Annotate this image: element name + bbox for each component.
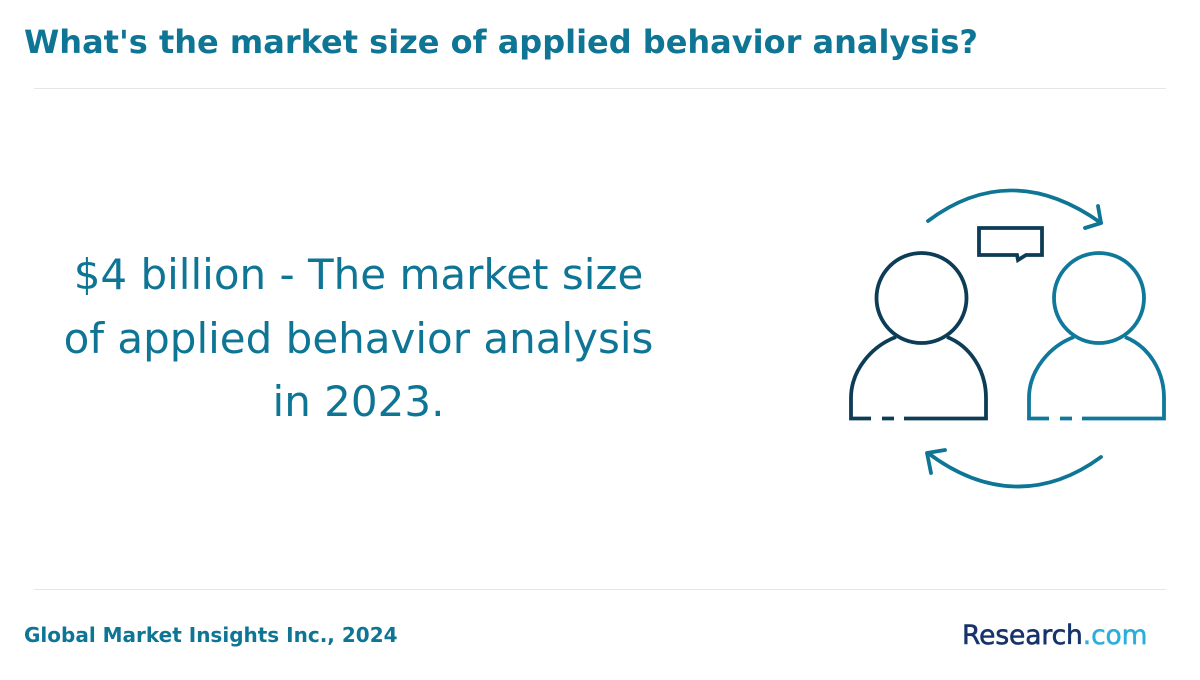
main statement [64, 250, 653, 426]
main statement: of applied behavior analysis [64, 314, 653, 362]
icon: bottom arrow [927, 450, 1101, 487]
source note: Global Market Insights Inc., 2024 [24, 623, 398, 647]
main statement: in 2023. [273, 377, 444, 426]
icon: speech bubble [979, 228, 1042, 260]
logo: Research.com: Research.com [962, 620, 1147, 651]
icon: right person [1029, 253, 1164, 418]
icon: left person [851, 253, 986, 418]
icon: two people in conversation [849, 188, 1166, 488]
main statement: $4 billion - The market size [74, 250, 643, 299]
icon: top arrow [928, 190, 1101, 228]
title: What's the market size of applied behavior analysis? [24, 23, 978, 61]
